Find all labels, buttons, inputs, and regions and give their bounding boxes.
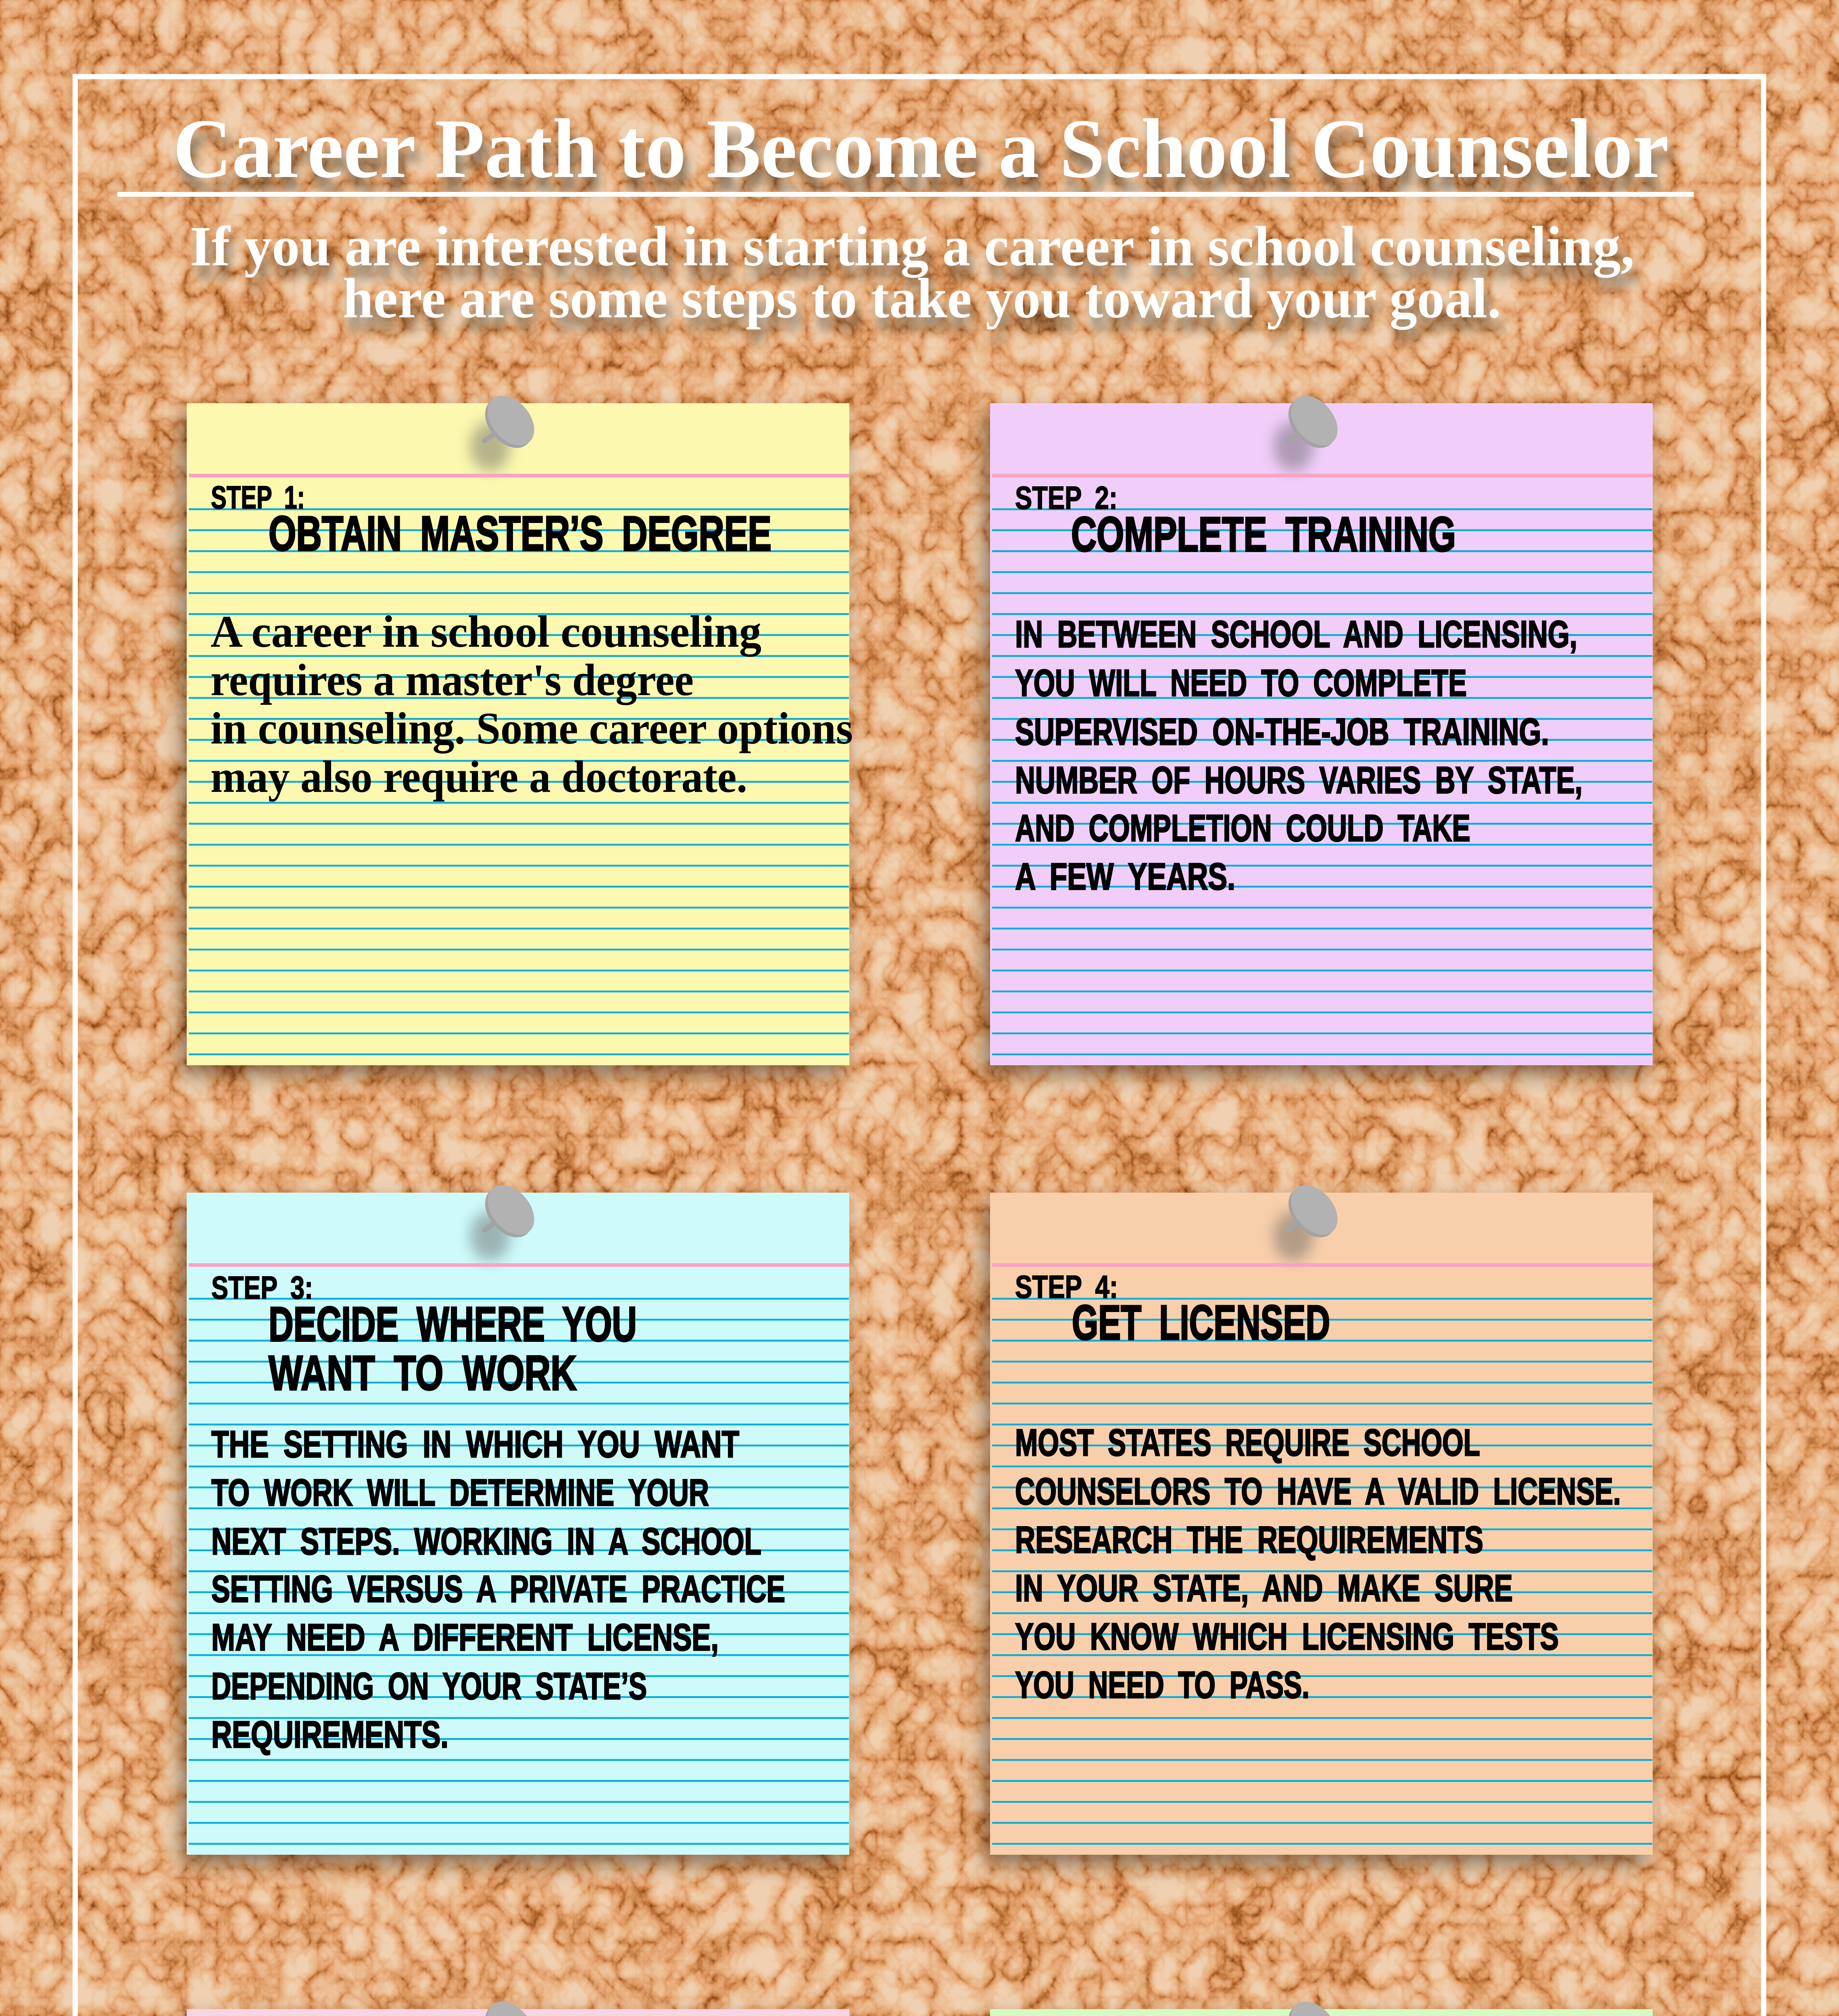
panel: step 6 note [984, 1993, 1653, 2016]
body text [211, 607, 853, 802]
body text: MAY NEED A DIFFERENT LICENSE, [211, 1616, 719, 1658]
body text: YOU NEED TO PASS. [1015, 1664, 1309, 1706]
body text: YOU WILL NEED TO COMPLETE [1015, 662, 1467, 704]
body text: THE SETTING IN WHICH YOU WANT [211, 1423, 739, 1465]
icon: push pin [1279, 387, 1347, 457]
body text: in counseling. Some career options [211, 704, 853, 754]
body text [211, 1423, 785, 1756]
title: Career Path to Become a School Counselor [173, 102, 1669, 196]
icon: push pin [1279, 1993, 1347, 2016]
subtitle [190, 215, 1635, 330]
body text: COUNSELORS TO HAVE A VALID LICENSE. [1015, 1470, 1621, 1512]
step label: STEP 2: [1015, 480, 1118, 516]
body text: SUPERVISED ON-THE-JOB TRAINING. [1015, 710, 1549, 753]
body text: TO WORK WILL DETERMINE YOUR [211, 1471, 709, 1514]
body text: A career in school counseling [211, 607, 761, 657]
body text: RESEARCH THE REQUIREMENTS [1015, 1518, 1483, 1561]
body text: NUMBER OF HOURS VARIES BY STATE, [1015, 759, 1583, 801]
body text: A FEW YEARS. [1015, 855, 1235, 898]
panel: step 1 note [181, 387, 853, 1075]
body text: DEPENDING ON YOUR STATE’S [211, 1665, 647, 1707]
icon: push pin [475, 1176, 544, 1246]
heading: GET LICENSED [1072, 1295, 1330, 1350]
heading: WANT TO WORK [269, 1345, 577, 1400]
body text: may also require a doctorate. [211, 752, 747, 802]
step label: STEP 1: [211, 479, 305, 515]
icon: push pin [475, 387, 544, 457]
panel: step 5 note [181, 1993, 849, 2016]
body text: REQUIREMENTS. [211, 1713, 448, 1756]
icon: push pin [1279, 1176, 1347, 1246]
body text: IN YOUR STATE, AND MAKE SURE [1015, 1567, 1513, 1609]
heading: COMPLETE TRAINING [1071, 507, 1456, 562]
step label: STEP 3: [211, 1270, 313, 1306]
heading: DECIDE WHERE YOU [269, 1297, 637, 1352]
subtitle: If you are interested in starting a career in school counseling, [190, 215, 1635, 278]
body text: AND COMPLETION COULD TAKE [1015, 807, 1470, 849]
body text: NEXT STEPS. WORKING IN A SCHOOL [211, 1520, 761, 1562]
subtitle: here are some steps to take you toward your goal. [343, 267, 1501, 330]
body text: YOU KNOW WHICH LICENSING TESTS [1015, 1615, 1559, 1658]
icon: push pin [475, 1993, 544, 2016]
panel: step 3 note [181, 1176, 849, 1865]
body text [1015, 1421, 1621, 1706]
step label: STEP 4: [1015, 1269, 1118, 1305]
panel: step 2 note [984, 387, 1653, 1075]
heading [269, 1297, 637, 1400]
body text: SETTING VERSUS A PRIVATE PRACTICE [211, 1568, 785, 1610]
body text: IN BETWEEN SCHOOL AND LICENSING, [1015, 613, 1577, 655]
title underline [117, 192, 1694, 197]
body text [1015, 613, 1583, 898]
body text: requires a master's degree [211, 655, 694, 705]
heading: OBTAIN MASTER’S DEGREE [269, 506, 771, 561]
body text: MOST STATES REQUIRE SCHOOL [1015, 1421, 1480, 1464]
panel: step 4 note [984, 1176, 1653, 1865]
